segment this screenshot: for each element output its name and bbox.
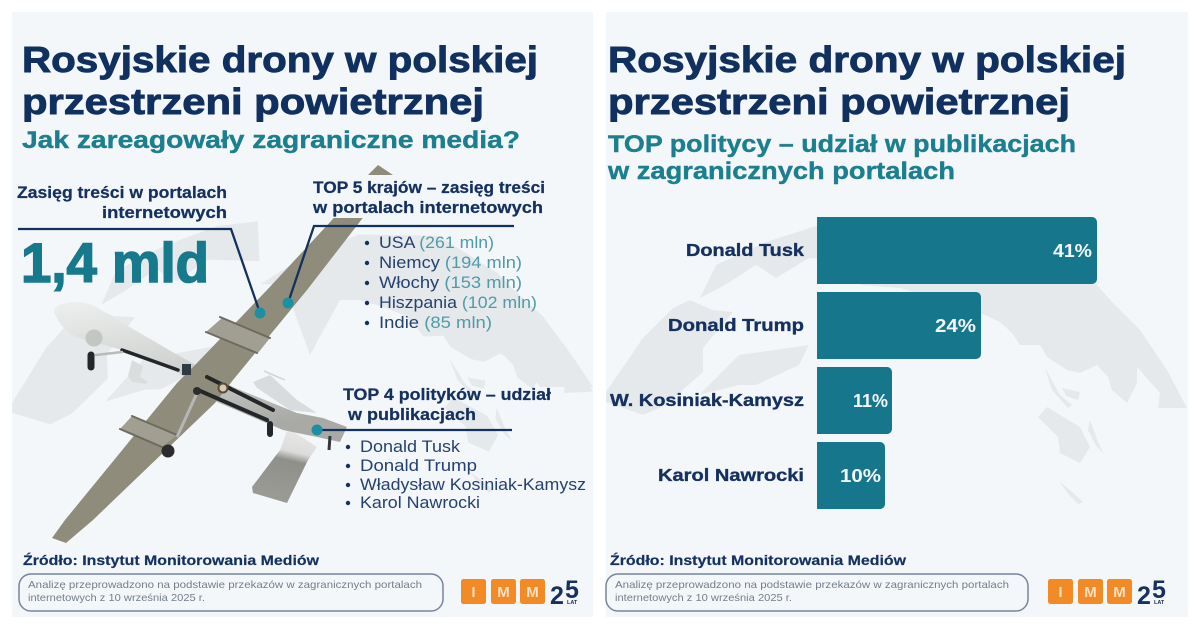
title [22, 39, 538, 122]
callout: reach: internetowych [102, 204, 227, 222]
leader line: reach [18, 229, 260, 313]
subtitle: Jak zareagowały zagraniczne media? [22, 127, 520, 154]
drone fuselage [54, 302, 347, 442]
leader dot: politicians [312, 424, 322, 436]
logo: IMM 25 lat [461, 576, 579, 610]
bar: Karol Nawrocki [658, 442, 885, 509]
panel: right infographic [606, 12, 1188, 617]
country list: Hiszpania (102 mln) [379, 293, 537, 312]
logo: IMM 25 lat: 2 [550, 582, 564, 610]
drone upper tail [253, 375, 317, 413]
world globe background [12, 222, 593, 492]
leader dot: reach [254, 308, 266, 318]
callout: top 4 politicians: w publikacjach [347, 406, 476, 424]
source: Źródło: Instytut Monitorowania Mediów [610, 552, 906, 568]
bar: Donald Tusk: 41% [1053, 241, 1092, 261]
logo: IMM 25 lat [1048, 576, 1166, 610]
politician list [346, 437, 586, 512]
politician list: Donald Trump [360, 456, 477, 475]
politician list: Władysław Kosiniak-Kamysz [360, 475, 586, 494]
bar: W. Kosiniak-Kamysz: 11% [853, 391, 888, 411]
callout: top 5 countries [282, 179, 545, 332]
bar: W. Kosiniak-Kamysz [610, 367, 892, 434]
bar: Donald Tusk [686, 217, 1097, 284]
methodology note: internetowych z 10 września 2025 r. [28, 592, 205, 604]
callout: top 4 politicians [312, 386, 586, 512]
logo: IMM 25 lat: M [526, 584, 539, 601]
world globe background [606, 222, 1187, 504]
drone belly pod [128, 360, 148, 384]
bar: Donald Tusk: Donald Tusk [686, 240, 804, 260]
bar: W. Kosiniak-Kamysz: W. Kosiniak-Kamysz [610, 390, 804, 410]
callout: reach: Zasięg treści w portalach [17, 184, 227, 202]
source: Źródło: Instytut Monitorowania Mediów [23, 552, 319, 568]
methodology note: Analizę przeprowadzono na podstawie przekazów w zagranicznych portalach [615, 579, 1009, 591]
country list: Indie (85 mln) [379, 313, 492, 332]
bar: Donald Trump: 24% [935, 316, 976, 336]
subtitle [607, 131, 1076, 185]
text backing over wing [310, 175, 560, 218]
methodology note [19, 574, 443, 611]
drone landing gear [177, 393, 197, 437]
logo: IMM 25 lat: LAT [1154, 600, 1165, 606]
bar: Karol Nawrocki: 10% [840, 466, 881, 486]
logo: IMM 25 lat: M [497, 584, 510, 601]
drone pylons [120, 317, 270, 447]
bar: Donald Trump [668, 292, 981, 359]
big number: 1,4 mld [21, 231, 209, 294]
callout: top 5 countries: TOP 5 krajów – zasięg treści [313, 179, 545, 197]
country list: Włochy (153 mln) [379, 273, 522, 292]
logo: IMM 25 lat: 5 [565, 576, 579, 604]
country list: Niemcy (194 mln) [379, 253, 522, 272]
callout: reach [17, 184, 266, 318]
leader line: countries [288, 226, 514, 303]
logo: IMM 25 lat: 2 [1137, 582, 1151, 610]
panel: left infographic [4, 12, 598, 617]
methodology note: Analizę przeprowadzono na podstawie przekazów w zagranicznych portalach [28, 579, 422, 591]
drone sensor ball [86, 330, 102, 346]
methodology note [606, 574, 1028, 611]
logo: IMM 25 lat: 5 [1152, 576, 1166, 604]
callout: top 4 politicians: TOP 4 polityków – udział [343, 386, 551, 404]
title: przestrzeni powietrznej [608, 81, 1070, 122]
logo: IMM 25 lat: I [1058, 584, 1063, 601]
subtitle: w zagranicznych portalach [607, 158, 955, 185]
logo: IMM 25 lat: I [471, 584, 476, 601]
bar chart [610, 217, 1097, 509]
logo: IMM 25 lat: M [1113, 584, 1126, 601]
logo: IMM 25 lat: M [1084, 584, 1097, 601]
subtitle: TOP politycy – udział w publikacjach [608, 131, 1076, 158]
title: Rosyjskie drony w polskiej [22, 39, 538, 80]
drone black fittings [91, 350, 273, 434]
drone wing [52, 165, 396, 543]
leader line: politicians [317, 429, 512, 431]
methodology note: internetowych z 10 września 2025 r. [615, 592, 792, 604]
callout: top 5 countries: w portalach internetowych [312, 199, 543, 217]
bar: Karol Nawrocki: Karol Nawrocki [658, 465, 804, 485]
drone illustration [52, 165, 396, 543]
title [608, 39, 1126, 122]
drone wing light patches [120, 318, 270, 447]
title: Rosyjskie drony w polskiej [608, 39, 1126, 80]
politician list: Donald Tusk [360, 437, 461, 456]
title: przestrzeni powietrznej [22, 81, 484, 122]
logo: IMM 25 lat: LAT [567, 600, 578, 606]
politician list: Karol Nawrocki [360, 493, 480, 512]
country list: USA (261 mln) [379, 233, 494, 252]
bar: Donald Trump: Donald Trump [668, 315, 804, 335]
leader dot: countries [282, 298, 294, 308]
country list [365, 233, 537, 332]
drone tail fin [252, 428, 317, 503]
